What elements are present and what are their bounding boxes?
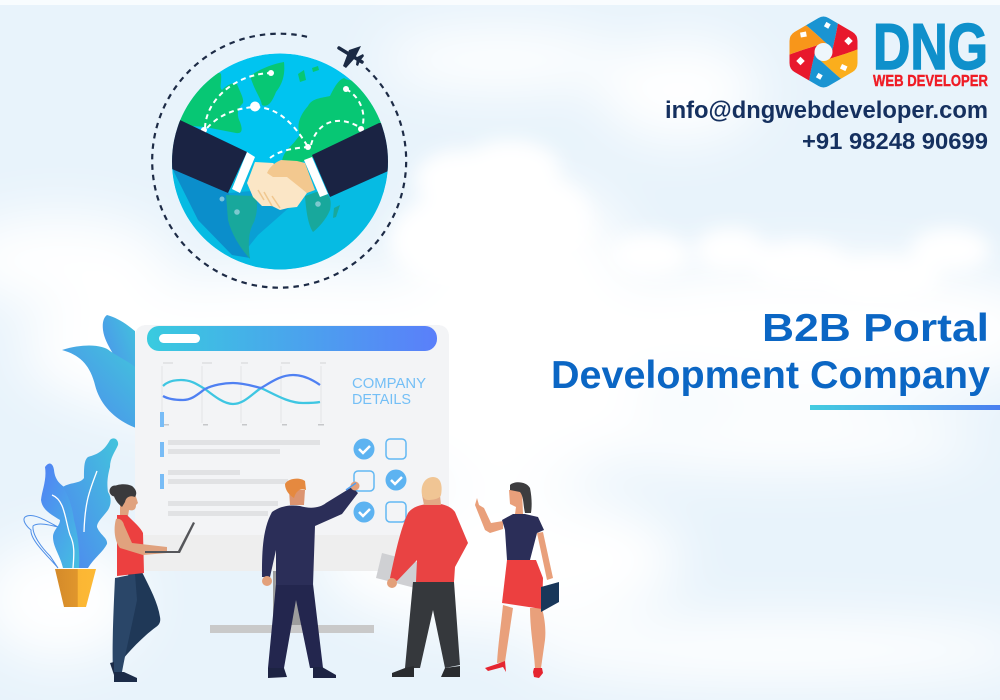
right sleeve [312, 123, 395, 197]
red top [117, 515, 144, 576]
logo [790, 16, 988, 88]
legs [497, 605, 545, 668]
line chart [162, 362, 326, 426]
globe illustration with handshake [152, 34, 406, 288]
title: B2B Portal [762, 307, 989, 350]
shoes [485, 661, 543, 678]
potted plant [24, 438, 118, 607]
back leg [118, 572, 160, 660]
icon: hexagonal swirl [790, 16, 858, 88]
arms [475, 498, 503, 533]
title underline [810, 405, 1000, 410]
contact phone: +91 98248 90699 [802, 128, 988, 154]
company details label [352, 376, 426, 408]
dashed flight routes [205, 73, 363, 158]
briefcase [541, 582, 559, 612]
globe disc [172, 54, 388, 270]
man in red sweater [376, 477, 468, 677]
contact email: info@dngwebdeveloper.com [665, 97, 988, 124]
head and hair [120, 490, 138, 516]
skirt [502, 560, 543, 609]
front leg [113, 574, 137, 672]
text bars [168, 440, 320, 516]
woman with laptop [110, 484, 195, 682]
company details label: DETAILS [352, 392, 411, 408]
teal continents in shadow [226, 190, 340, 259]
hair [510, 482, 532, 513]
man pointing at board [262, 479, 360, 678]
company details label: COMPANY [352, 376, 426, 392]
laptop [145, 522, 195, 553]
dashed orbit [152, 34, 406, 288]
large leaves behind panel [62, 315, 136, 428]
handshake [247, 160, 315, 210]
head [509, 490, 523, 514]
dark blue arm shadow [172, 168, 250, 258]
dashboard panel [135, 325, 449, 633]
stand [273, 570, 304, 625]
arm [115, 519, 167, 555]
woman with briefcase [475, 482, 559, 678]
icon: airplane [339, 46, 364, 68]
title: Development Company [551, 354, 990, 397]
shirt [502, 514, 544, 560]
green continents [170, 62, 385, 162]
left sleeve [165, 120, 247, 193]
header bar [147, 326, 437, 351]
title [551, 307, 990, 397]
checklist [354, 438, 406, 522]
